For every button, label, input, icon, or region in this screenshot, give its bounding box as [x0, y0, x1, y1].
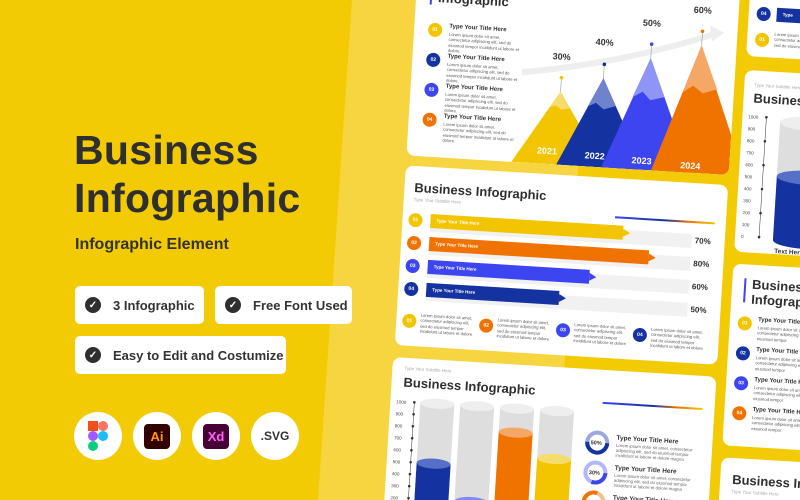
bars: 70%: [694, 236, 711, 246]
card1 list items: Lorem ipsum dolor sit amet, consectetur adipiscing elit, sed do eiusmod tempor incididunt ut labore et dolore.: [448, 32, 519, 54]
right card C: list: 01: [742, 320, 748, 327]
right card B: cylinder: 400: [744, 186, 752, 192]
card1 list items: 01: [432, 27, 438, 33]
cylinder chart: 1000: [396, 399, 407, 405]
feature badges: Free Font Used: [253, 298, 348, 312]
feature badges: ✓: [89, 350, 97, 360]
mountain chart: [511, 5, 732, 174]
bottom descriptions: Lorem ipsum dolor sit amet, consectetur adipiscing elit, sed do eiusmod tempor incididunt ut labore et dolore: [496, 317, 549, 342]
card1 list items: [422, 22, 520, 144]
right card C: list: [722, 264, 800, 457]
bars: 02: [411, 240, 417, 246]
bars: 50%: [690, 305, 707, 315]
right card B: cylinder: 300: [743, 198, 751, 204]
right card D: Type Your Subtitle Here: [731, 489, 779, 497]
cylinder chart: 800: [395, 423, 403, 429]
card1 list items: Lorem ipsum dolor sit amet, consectetur adipiscing elit, sed do eiusmod tempor incididunt ut labore et dolore.: [442, 122, 514, 144]
bottom descriptions: Lorem ipsum dolor sit amet, consectetur adipiscing elit, sed do eiusmod tempor incididunt ut labore et dolore: [420, 313, 472, 337]
icon: svg: .SVG: [261, 429, 289, 443]
right card B: cylinder: 800: [747, 138, 755, 144]
right card A: 04: [761, 11, 767, 17]
donut list: 50%: [590, 440, 602, 447]
subtitle: Infographic Element: [75, 236, 229, 253]
card1 list items: Type Your Title Here: [449, 24, 507, 33]
donut list: Type Your Title Here: [616, 435, 679, 446]
tool icons: [74, 412, 299, 460]
feature badges: ✓: [229, 300, 237, 310]
card 3: cylinder chart: [381, 357, 716, 500]
bottom descriptions: Lorem ipsum dolor sit amet, consectetur adipiscing elit, sed do eiusmod tempor incididunt ut labore et dolore: [573, 322, 626, 346]
icon: illustrator: [133, 412, 181, 460]
right card B: cylinder: 100: [742, 222, 750, 228]
mountain chart: 2023: [631, 155, 652, 166]
feature badges: 3 Infographic: [113, 298, 195, 312]
bottom descriptions: Lorem ipsum dolor sit amet, consectetur adipiscing elit, sed do eiusmod tempor incididunt ut labore et dolore: [650, 327, 703, 351]
bottom descriptions: [402, 313, 703, 351]
cylinder chart: [390, 398, 574, 500]
donut list: Lorem ipsum dolor sit amet, consectetur: [616, 443, 693, 452]
card1 list items: 03: [428, 87, 434, 93]
cylinder chart: 700: [394, 435, 402, 441]
right card C: list: 02: [740, 350, 746, 356]
icon: figma: [74, 412, 122, 460]
cylinder chart: 300: [391, 483, 399, 489]
bars: Type Your Title Here: [435, 241, 478, 249]
bars: [404, 213, 711, 317]
feature badges: Easy to Edit and Costumize: [113, 348, 283, 362]
right card A: [746, 0, 800, 68]
mountain chart: 60%: [694, 5, 712, 16]
bottom descriptions: 02: [483, 322, 489, 329]
card3 title: Business Infographic: [403, 375, 536, 398]
bottom descriptions: 01: [406, 318, 412, 324]
right card B: cylinder: 600: [745, 162, 754, 168]
bottom descriptions: 04: [637, 332, 643, 338]
donut list: adipiscing elit, sed do eiusmod tempor: [614, 478, 688, 487]
card1 list items: 02: [430, 57, 436, 63]
cylinder chart: 900: [395, 411, 404, 417]
card1 list items: Lorem ipsum dolor sit amet, consectetur adipiscing elit, sed do eiusmod tempor incididunt ut labore et dolore.: [446, 62, 517, 84]
card1 list items: Lorem ipsum dolor sit amet, consectetur adipiscing elit, sed do eiusmod tempor incididunt ut labore et dolore.: [444, 92, 516, 114]
right card B: cylinder: 200: [742, 210, 751, 216]
bars: 04: [408, 286, 414, 292]
right card A: 01: [759, 37, 765, 43]
right card B: cylinder: 0: [741, 234, 744, 239]
right card B: cylinder: 1000: [748, 114, 759, 120]
right card A: Type: [783, 12, 793, 18]
icon: illustrator: Ai: [150, 428, 164, 444]
right card C: list: 04: [736, 410, 742, 416]
card1 list items: Type Your Title Here: [447, 54, 505, 63]
bars: 80%: [693, 259, 710, 269]
right card D: [710, 457, 800, 500]
mountain chart: 50%: [643, 18, 661, 29]
cylinder chart: 600: [393, 447, 402, 453]
donut list: Type Your Title Here: [614, 465, 677, 476]
bars: 03: [410, 263, 416, 269]
donut list: Lorem ipsum dolor sit amet, consectetur: [614, 473, 691, 482]
mountain chart: 2021: [537, 145, 557, 157]
donut list: [582, 430, 693, 500]
mountain chart: 40%: [595, 37, 614, 48]
card1 list items: Type Your Title Here: [445, 84, 503, 93]
card1 list items: Type Your Title Here: [444, 114, 501, 123]
bars: Type Your Title Here: [436, 218, 479, 226]
mountain chart: 30%: [552, 51, 571, 62]
bottom descriptions: 03: [560, 327, 566, 333]
donut list: incididunt ut labore et dolore magna: [615, 453, 684, 462]
bars: 01: [413, 217, 418, 223]
main title: Business: [74, 127, 259, 173]
main title: Infographic: [74, 175, 301, 221]
right card B: cylinder: 500: [745, 174, 753, 180]
cylinder chart: 400: [392, 471, 400, 477]
main title: [74, 127, 301, 221]
card2 title: Type Your Subtitle Here: [414, 197, 461, 205]
donut list: adipiscing elit, sed do eiusmod tempor: [616, 448, 689, 457]
cylinder chart: 500: [393, 459, 401, 465]
icon: svg: [251, 412, 299, 460]
gradient line: [615, 216, 715, 224]
feature badges: [75, 286, 352, 374]
donut list: 30%: [589, 470, 600, 477]
card group: rotated mockups: [384, 0, 800, 500]
right card B: cylinder: 900: [748, 126, 756, 132]
bars: 60%: [692, 282, 708, 292]
card1 list items: 04: [427, 117, 433, 123]
right card B: cylinder: 700: [746, 150, 754, 156]
right card B: cylinder: [734, 70, 800, 264]
card 2: bar infographic: [395, 165, 728, 365]
card3 title: Type Your Subtitle Here: [404, 366, 452, 374]
icon: xd: Xd: [208, 428, 224, 444]
mountain chart: 2022: [584, 150, 605, 162]
icon: xd: [192, 412, 240, 460]
donut list: incididunt ut labore et dolore magna: [614, 483, 683, 492]
right card C: list: 03: [738, 380, 744, 386]
feature badges: ✓: [89, 300, 97, 310]
card 1: mountain infographic: [406, 0, 741, 175]
bars: Type Your Title Here: [432, 287, 475, 295]
mountain chart: 2024: [680, 160, 701, 171]
card2 title: Business Infographic: [414, 180, 547, 203]
bars: Type Your Title Here: [434, 264, 477, 272]
